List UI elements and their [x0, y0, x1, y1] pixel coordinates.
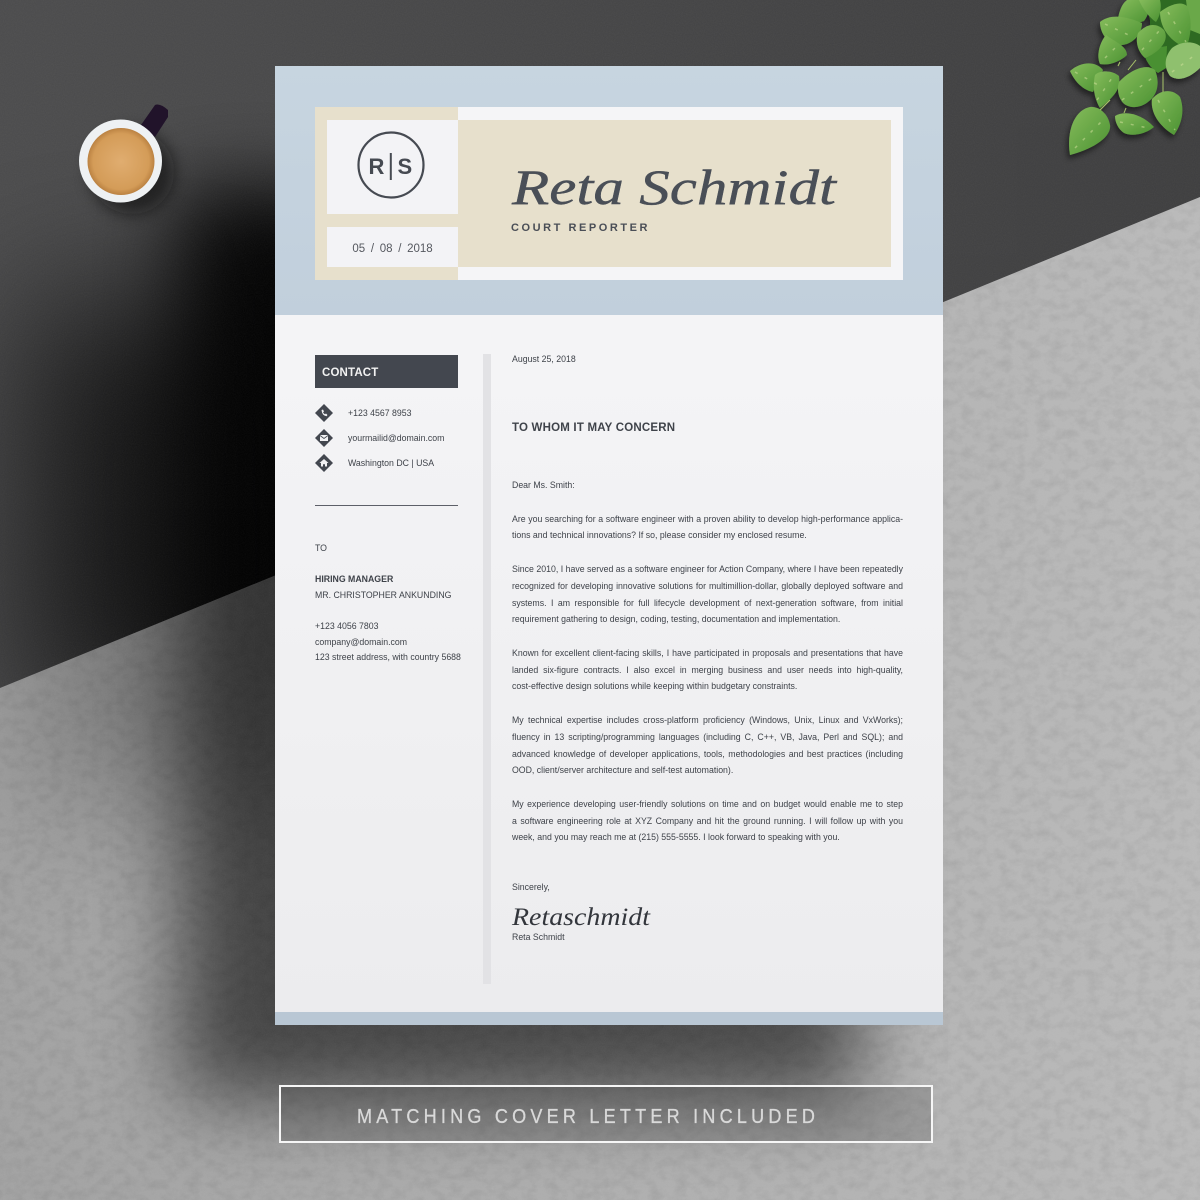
signature: Retaschmidt: [511, 904, 651, 931]
phone text: +123 4567 8953: [348, 408, 412, 418]
name in script style: Reta Schmidt: [511, 159, 837, 215]
panel: name header: [315, 107, 903, 280]
job title: COURT REPORTER: [511, 222, 650, 234]
paragraph 2: requirement gathering to design, coding, testing, documentation and implementation.: [512, 614, 840, 624]
paragraph 3: [512, 648, 903, 691]
panel: blue header band: [275, 66, 943, 315]
paragraph 2: recognized for developing innovative solutions for multimillion-dollar, globally deployed software and: [512, 581, 903, 591]
paragraph 1: Are you searching for a software engineer with a proven ability to develop high-performance applica-: [512, 514, 903, 524]
beige name panel: [458, 120, 891, 267]
contact heading: [315, 355, 458, 388]
icon: phone: [315, 404, 333, 422]
monogram logo: S: [398, 154, 412, 179]
paragraph 3: cost-effective design solutions while keeping within budgetary constraints.: [512, 681, 797, 691]
recipient name: MR. CHRISTOPHER ANKUNDING: [315, 590, 451, 600]
to label: TO: [315, 543, 327, 553]
icon: email: [315, 429, 333, 447]
paragraph 5: week, and you may reach me at (215) 555-5555. I look forward to speaking with you.: [512, 832, 840, 842]
date box: [327, 227, 458, 267]
paragraph 1: tions and technical innovations? If so, please consider my enclosed resume.: [512, 530, 807, 540]
paragraph 2: Since 2010, I have served as a software engineer for Action Company, where I have been repeatedly: [512, 564, 903, 574]
monogram logo: [357, 131, 425, 199]
letter date: August 25, 2018: [512, 354, 576, 364]
monogram logo: R: [368, 154, 384, 179]
monogram box: [327, 120, 458, 214]
recipient address: 123 street address, with country 5688: [315, 652, 461, 662]
vertical column divider: [483, 354, 491, 984]
address text: Washington DC | USA: [348, 458, 434, 468]
recipient block: [315, 543, 461, 662]
paragraph 2: systems. I am responsible for full lifecycle development of next-generation software, from initial: [512, 598, 903, 608]
letter heading: TO WHOM IT MAY CONCERN: [512, 422, 675, 434]
paragraph 4: [512, 715, 903, 775]
paragraph 5: [512, 799, 903, 842]
panel: footer band: [275, 1012, 943, 1025]
paragraph 1: [512, 514, 903, 540]
icon: green plant leaves: [1065, 0, 1200, 160]
recipient email: company@domain.com: [315, 637, 407, 647]
signer name: Reta Schmidt: [512, 932, 565, 942]
divider rule: [315, 505, 458, 506]
icon: coffee cup: [79, 104, 180, 220]
contact label: CONTACT: [322, 367, 378, 379]
paragraph 4: My technical expertise includes cross-platform proficiency (Windows, Unix, Linux and VxWorks);: [512, 715, 903, 725]
paragraph 4: fluency in 13 scripting/programming languages (including C, C++, VB, Java, Perl and SQL); and: [512, 732, 903, 742]
paragraph 4: advanced knowledge of developer applications, tools, methodologies and best practices (including: [512, 749, 903, 759]
banner: matching cover letter: [279, 1085, 933, 1143]
date: 05 / 08 / 2018: [352, 243, 433, 255]
email text: yourmailid@domain.com: [348, 433, 444, 443]
letter body: [512, 514, 903, 842]
recipient phone: +123 4056 7803: [315, 621, 379, 631]
beige left column: [315, 107, 458, 280]
banner text: MATCHING COVER LETTER INCLUDED: [357, 1105, 819, 1128]
paragraph 2: [512, 564, 903, 624]
recipient title: HIRING MANAGER: [315, 574, 393, 584]
sign-off: Sincerely,: [512, 882, 550, 892]
paragraph 4: OOD, client/server architecture and self-test automation).: [512, 765, 733, 775]
icon: home: [315, 454, 333, 472]
salutation: Dear Ms. Smith:: [512, 480, 575, 490]
panel: resume document: [275, 66, 943, 1025]
paragraph 3: Known for excellent client-facing skills, I have participated in proposals and presentations that have: [512, 648, 903, 658]
paragraph 3: landed six-figure contracts. I also excel in merging business and user needs into high-quality,: [512, 665, 903, 675]
